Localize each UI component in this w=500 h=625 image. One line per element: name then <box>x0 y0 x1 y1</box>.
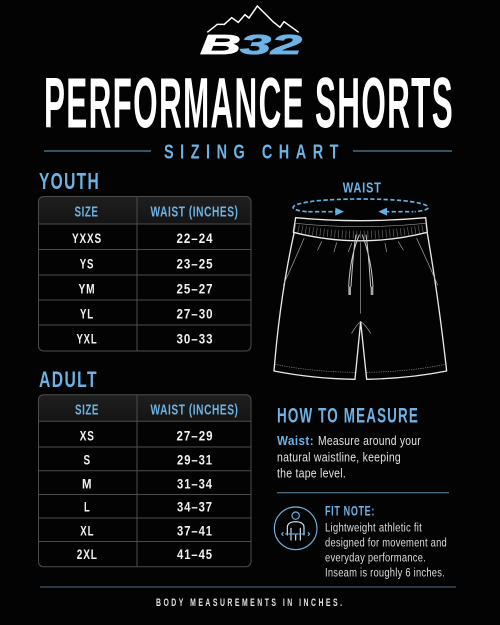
row YM: YM <box>78 280 96 296</box>
text block: measuring instructions <box>277 433 421 480</box>
waistband <box>293 218 427 241</box>
line 1: Measure around your <box>318 433 421 448</box>
line 3: the tape level. <box>277 466 346 480</box>
logo number: 32 <box>240 29 303 60</box>
value 27-30: 27–30 <box>176 305 214 321</box>
value 41-45: 41–45 <box>177 546 213 562</box>
row S: S <box>84 452 91 468</box>
row M: M <box>82 475 93 491</box>
shorts body outline <box>274 233 447 379</box>
pocket lines and seams <box>283 238 438 333</box>
row L: L <box>84 499 91 515</box>
fit note text <box>325 503 447 580</box>
icon: waist measuring tape arrows <box>293 199 428 216</box>
fit line 1: Lightweight athletic fit <box>325 521 422 535</box>
waist label: Waist: <box>277 433 314 448</box>
value 25-27: 25–27 <box>176 280 214 296</box>
row YS: YS <box>80 255 94 271</box>
value 29-31: 29–31 <box>177 452 213 468</box>
value 27-29: 27–29 <box>176 427 214 443</box>
drawstring <box>349 235 373 287</box>
logo wordmark: B <box>200 29 241 60</box>
panel: adult size table <box>38 395 251 567</box>
value 23-25: 23–25 <box>176 255 214 271</box>
waist label: WAIST <box>343 180 382 197</box>
footer note: BODY MEASUREMENTS IN INCHES. <box>156 597 344 609</box>
value 37-41: 37–41 <box>177 523 213 539</box>
youth header: waist: WAIST (INCHES) <box>150 205 238 221</box>
adult header: waist: WAIST (INCHES) <box>150 402 238 418</box>
logo: B32 mountain <box>200 6 303 60</box>
value 30-33: 30–33 <box>176 330 214 346</box>
hem stitching <box>275 364 446 372</box>
illustration: shorts <box>274 218 447 379</box>
row YXL: YXL <box>76 330 98 346</box>
fit line 3: everyday performance. <box>325 551 426 565</box>
value 31-34: 31–34 <box>177 475 213 491</box>
fit line 4: Inseam is roughly 6 inches. <box>325 566 445 580</box>
adult header: size: SIZE <box>75 402 99 418</box>
fit note heading: FIT NOTE: <box>325 503 375 519</box>
line 2: natural waistline, keeping <box>277 450 401 464</box>
subtitle text: SIZING CHART <box>164 142 345 164</box>
value 22-24: 22–24 <box>176 230 214 246</box>
youth header: size: SIZE <box>74 205 98 221</box>
icon: mountain peaks <box>207 6 299 32</box>
row YXXS: YXXS <box>72 230 102 246</box>
value 34-37: 34–37 <box>177 499 213 515</box>
heading: youth: YOUTH <box>39 168 100 194</box>
panel: youth size table <box>38 196 251 351</box>
row 2XL: 2XL <box>77 546 98 562</box>
row XS: XS <box>80 427 95 443</box>
row YL: YL <box>80 305 94 321</box>
fit line 2: designed for movement and <box>325 536 447 550</box>
heading: how to measure: HOW TO MEASURE <box>277 405 419 428</box>
row XL: XL <box>80 523 94 539</box>
icon: fit note person in circle <box>274 507 317 550</box>
drawstring tips <box>350 287 372 295</box>
heading: adult: ADULT <box>39 367 98 392</box>
